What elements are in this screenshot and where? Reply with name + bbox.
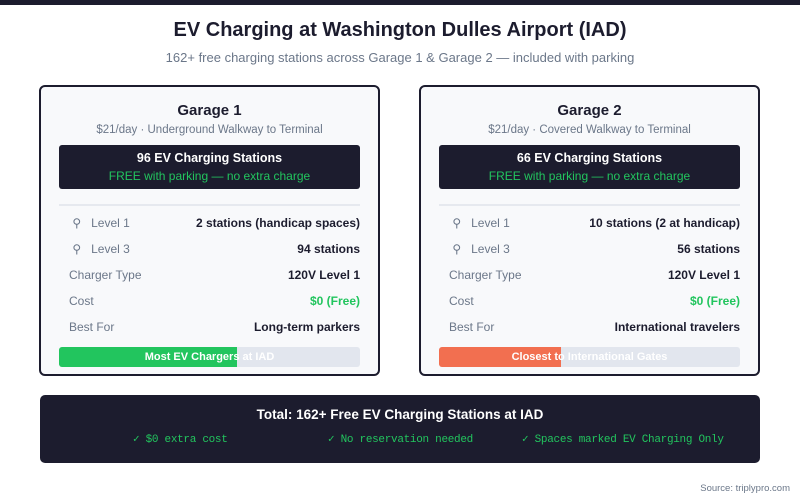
checks: ✓ Spaces marked EV Charging Only xyxy=(522,434,724,446)
row level 1: ⚲ Level 1 xyxy=(452,216,510,230)
bar: Most EV Chargers at IAD xyxy=(145,351,274,363)
title: EV Charging at Washington Dulles Airport (IAD) xyxy=(174,19,626,41)
row level 1 xyxy=(72,216,360,230)
row level 3: ⚲ Level 3 xyxy=(452,242,510,256)
panel: garage 1 xyxy=(39,85,380,376)
row level 1: ⚲ Level 1 xyxy=(72,216,130,230)
stations box: 66 EV Charging Stations xyxy=(517,151,662,165)
row cost: Cost xyxy=(69,294,94,308)
source: Source: triplypro.com xyxy=(700,483,790,494)
panel: total xyxy=(40,395,760,463)
row level 1: 2 stations (handicap spaces) xyxy=(196,216,360,230)
checks: ✓ $0 extra cost xyxy=(133,434,228,446)
text: price: $21/day · Underground Walkway to Terminal xyxy=(96,124,323,136)
row cost: $0 (Free) xyxy=(310,294,360,308)
row level 1: 10 stations (2 at handicap) xyxy=(589,216,740,230)
row charger xyxy=(449,268,740,282)
checks: ✓ No reservation needed xyxy=(328,434,473,446)
total heading: Total: 162+ Free EV Charging Stations at IAD xyxy=(257,407,543,422)
row charger: Charger Type xyxy=(449,268,522,282)
top strip xyxy=(0,0,800,5)
row level 3 xyxy=(452,242,740,256)
stations box xyxy=(439,145,740,189)
text: price: $21/day · Covered Walkway to Terminal xyxy=(488,124,691,136)
row best: Best For xyxy=(449,320,494,334)
row cost: Cost xyxy=(449,294,474,308)
heading: Garage 1 xyxy=(177,102,242,119)
panel: garage 2 xyxy=(419,85,760,376)
bar xyxy=(59,347,360,367)
row level 1 xyxy=(452,216,740,230)
row level 3: 56 stations xyxy=(677,242,740,256)
row level 3: 94 stations xyxy=(297,242,360,256)
row charger: Charger Type xyxy=(69,268,142,282)
row level 3 xyxy=(72,242,360,256)
bar xyxy=(439,347,740,367)
row best: Best For xyxy=(69,320,114,334)
row charger xyxy=(69,268,360,282)
row best xyxy=(69,320,360,334)
row best: International travelers xyxy=(615,320,740,334)
row cost xyxy=(69,294,360,308)
row best xyxy=(449,320,740,334)
row charger: 120V Level 1 xyxy=(288,268,360,282)
subtitle: 162+ free charging stations across Garage 1 & Garage 2 — included with parking xyxy=(166,50,634,65)
bar: Closest to International Gates xyxy=(512,351,667,363)
row charger: 120V Level 1 xyxy=(668,268,740,282)
stations box xyxy=(59,145,360,189)
row cost: $0 (Free) xyxy=(690,294,740,308)
stations box: 96 EV Charging Stations xyxy=(137,151,282,165)
stations box: FREE with parking — no extra charge xyxy=(489,169,690,183)
row best: Long-term parkers xyxy=(254,320,360,334)
checks xyxy=(133,434,724,446)
heading: Garage 2 xyxy=(557,102,622,119)
stations box: FREE with parking — no extra charge xyxy=(109,169,310,183)
row level 3: ⚲ Level 3 xyxy=(72,242,130,256)
row cost xyxy=(449,294,740,308)
